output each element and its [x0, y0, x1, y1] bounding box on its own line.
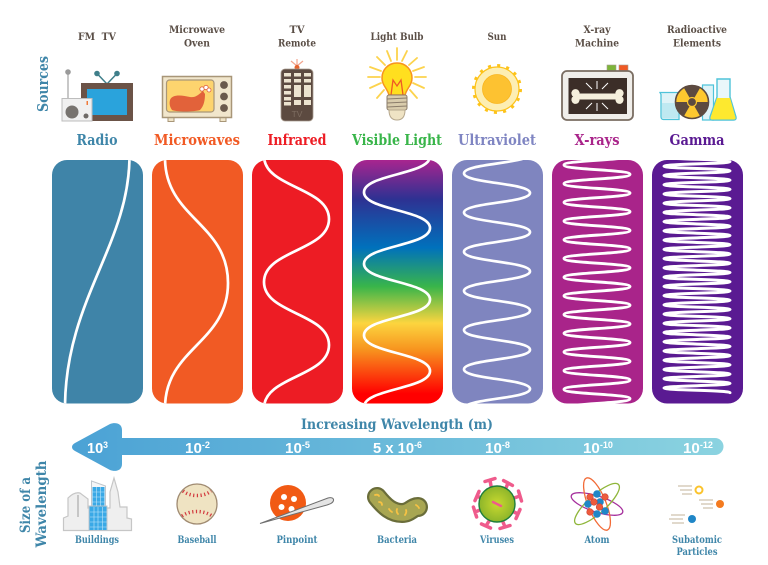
icon: bacteria [375, 495, 419, 515]
icon: TV remote [281, 59, 313, 121]
panel: x-ray wave [552, 156, 643, 408]
source label: Radioactive Elements: Elements [673, 38, 721, 50]
label: Subatomic Particles [672, 535, 722, 558]
scale value: 10^-12: -12 [700, 440, 713, 450]
panel: radio wave [52, 156, 143, 408]
label: Bacteria: Bacteria [377, 535, 417, 546]
icon: radio and TV [62, 69, 133, 121]
arrow: wavelength scale [72, 423, 724, 471]
title: Gamma: Gamma [670, 131, 725, 149]
scale value: 10^3: 10 [87, 440, 104, 457]
label: Baseball: Baseball [178, 535, 217, 546]
label: Buildings: Buildings [75, 535, 119, 546]
label: Atom: Atom [584, 535, 610, 546]
title: Radio: Radio [76, 131, 118, 149]
title: Ultraviolet: Ultraviolet [458, 131, 536, 149]
icon: buildings [64, 478, 132, 530]
title: X-rays: X-rays [574, 131, 620, 149]
scale value: 10^-8: 10 [485, 440, 502, 457]
icon: pinpoint [260, 485, 334, 524]
source label: Light Bulb: Light Bulb [370, 32, 424, 43]
panel: ultraviolet wave [452, 154, 543, 409]
scale value: 10^-5: -5 [302, 440, 310, 450]
scale value: 5 x 10^-6: 5 x 10 [373, 440, 415, 457]
panel: gamma wave [652, 157, 743, 404]
scale value: 10^-2: -2 [202, 440, 210, 450]
icon: baseball [177, 484, 217, 524]
source label: Sun: Sun [488, 32, 507, 43]
panel: visible light wave [352, 156, 443, 407]
scale value: 10^-10: 10 [583, 440, 600, 457]
source label: FM TV: FM TV [78, 32, 116, 43]
title: Infrared: Infrared [268, 131, 327, 149]
panel: microwave wave [152, 158, 243, 408]
icon: light bulb [368, 48, 426, 120]
source label: TV Remote: TV [290, 25, 305, 36]
scale value: 10^-10: -10 [600, 440, 613, 450]
icon: radioactive elements and flasks [660, 79, 736, 120]
label: Pinpoint: Pinpoint [276, 535, 318, 546]
scale value: 5 x 10^-6: -6 [414, 440, 422, 450]
heading: Sources: Sources [35, 56, 52, 112]
scale value: 10^-5: 10 [285, 440, 302, 457]
icon: microwave oven [162, 76, 232, 122]
scale value: 10^-12: 10 [683, 440, 700, 457]
icon: atom [569, 475, 625, 533]
title: Microwaves: Microwaves [154, 131, 240, 149]
source label: X-ray Machine [575, 25, 619, 50]
icon: subatomic particles [669, 486, 724, 523]
title: Visible Light: Visible Light [351, 131, 442, 149]
label: Viruses: Viruses [479, 535, 514, 546]
icon: TV remote: TV [292, 109, 303, 119]
source label: X-ray Machine: X-ray [584, 25, 612, 36]
source label: TV Remote [278, 25, 316, 50]
icon: X-ray machine [562, 65, 633, 120]
label: Subatomic Particles: Particles [676, 547, 718, 558]
scale value: 10^-2: 10 [185, 440, 202, 457]
scale value: 10^3: 3 [103, 440, 108, 450]
heading: Size of a Wavelength: Wavelength [34, 460, 50, 548]
heading: Size of a Wavelength: Size of a [18, 477, 34, 533]
source label: Radioactive Elements: Radioactive [667, 25, 727, 36]
source label: Microwave Oven: Oven [184, 38, 211, 50]
source label: Microwave Oven: Microwave [169, 25, 225, 36]
icon: sun [474, 66, 520, 112]
source label: Radioactive Elements [667, 25, 727, 50]
heading: Size of a Wavelength [18, 460, 50, 548]
heading: Increasing Wavelength (m): Increasing Wavelength (m) [301, 417, 493, 433]
source label: Microwave Oven [169, 25, 225, 50]
scale value: 10^-8: -8 [502, 440, 510, 450]
icon: virus [473, 478, 522, 528]
label: Subatomic Particles: Subatomic [672, 535, 722, 546]
panel: infrared wave [252, 156, 343, 408]
source label: TV Remote: Remote [278, 38, 316, 50]
source label: X-ray Machine: Machine [575, 38, 619, 50]
